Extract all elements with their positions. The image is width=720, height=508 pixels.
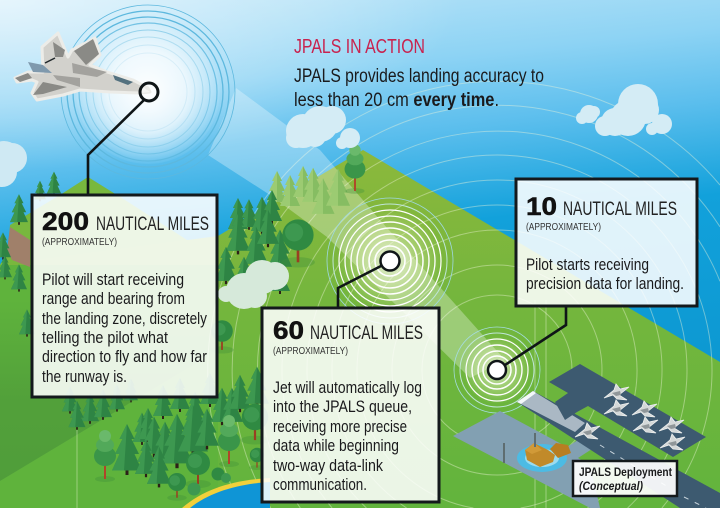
leader line: 200 NM (88, 100, 144, 194)
description: data while beginning (273, 437, 399, 455)
trees: left group (0, 172, 61, 337)
signal rings: aircraft (200 NM) (61, 5, 235, 179)
signal rings: 10 NM (454, 327, 540, 413)
description: Pilot starts receiving (526, 256, 649, 274)
panel: 10 nautical miles (516, 179, 697, 306)
description: two-way data-link (273, 457, 384, 475)
marker: aircraft (140, 83, 158, 101)
qualifier: (APPROXIMATELY) (526, 221, 601, 233)
description: the landing zone, discretely (42, 310, 208, 328)
signal beam (208, 88, 505, 378)
description (273, 379, 422, 494)
heading: 10: 10 (526, 193, 557, 221)
heading unit: NAUTICAL MILES (96, 214, 209, 235)
marker: 60 NM (380, 252, 400, 270)
signal rings: 60 NM (327, 198, 453, 324)
description: the runway is. (42, 368, 127, 386)
intro text: less than 20 cm every time. (294, 90, 499, 111)
label: JPALS deployment: (Conceptual) (579, 481, 643, 493)
description: Pilot will start receiving (42, 271, 184, 289)
left hill (0, 177, 218, 400)
main ground (0, 150, 720, 508)
JPALS ground vehicles (503, 433, 571, 472)
qualifier: (APPROXIMATELY) (273, 345, 348, 357)
intro text (294, 66, 544, 111)
description (42, 271, 208, 386)
heading: 60: 60 (273, 317, 304, 345)
heading unit: NAUTICAL MILES (310, 323, 423, 344)
trees: central hill (210, 190, 315, 354)
fighter jet (15, 33, 150, 100)
cliff (7, 227, 30, 267)
heading unit: NAUTICAL MILES (563, 199, 677, 220)
parking apron (549, 364, 706, 457)
qualifier: (APPROXIMATELY) (42, 236, 117, 248)
title: JPALS IN ACTION (294, 36, 425, 58)
cloud: mid hill (218, 260, 289, 309)
marker: 10 NM (488, 361, 506, 379)
panel: 200 nautical miles (32, 195, 217, 397)
heading: 200: 200 (42, 208, 89, 236)
label: JPALS deployment: JPALS Deployment (579, 467, 672, 479)
trees: hill behind the beam (267, 144, 365, 214)
cloud: centre (286, 106, 360, 149)
leader line: 10 NM (505, 306, 566, 365)
intro text: JPALS provides landing accuracy to (294, 66, 544, 87)
runway (517, 391, 720, 508)
leader line: 60 NM (338, 266, 381, 307)
river (182, 478, 270, 508)
description: communication. (273, 476, 367, 494)
description: into the JPALS queue, (273, 398, 412, 416)
darker ground shade (0, 300, 218, 481)
description: direction to fly and how far (42, 348, 207, 366)
label: JPALS deployment (573, 461, 677, 496)
description: range and bearing from (42, 290, 185, 308)
lit lower-left ground (0, 265, 218, 508)
description: telling the pilot what (42, 329, 168, 347)
panel: 60 nautical miles (262, 308, 439, 502)
faint signal arcs across sky and ground (77, 81, 720, 508)
parked jets (575, 384, 685, 450)
description (526, 256, 684, 293)
description: receiving more precise (273, 418, 407, 436)
cloud: right (576, 84, 672, 136)
description: Jet will automatically log (273, 379, 422, 397)
concrete pad (453, 411, 600, 508)
trees: forest below first panel (62, 367, 269, 508)
cloud: far left (0, 141, 27, 187)
description: precision data for landing. (526, 275, 684, 293)
